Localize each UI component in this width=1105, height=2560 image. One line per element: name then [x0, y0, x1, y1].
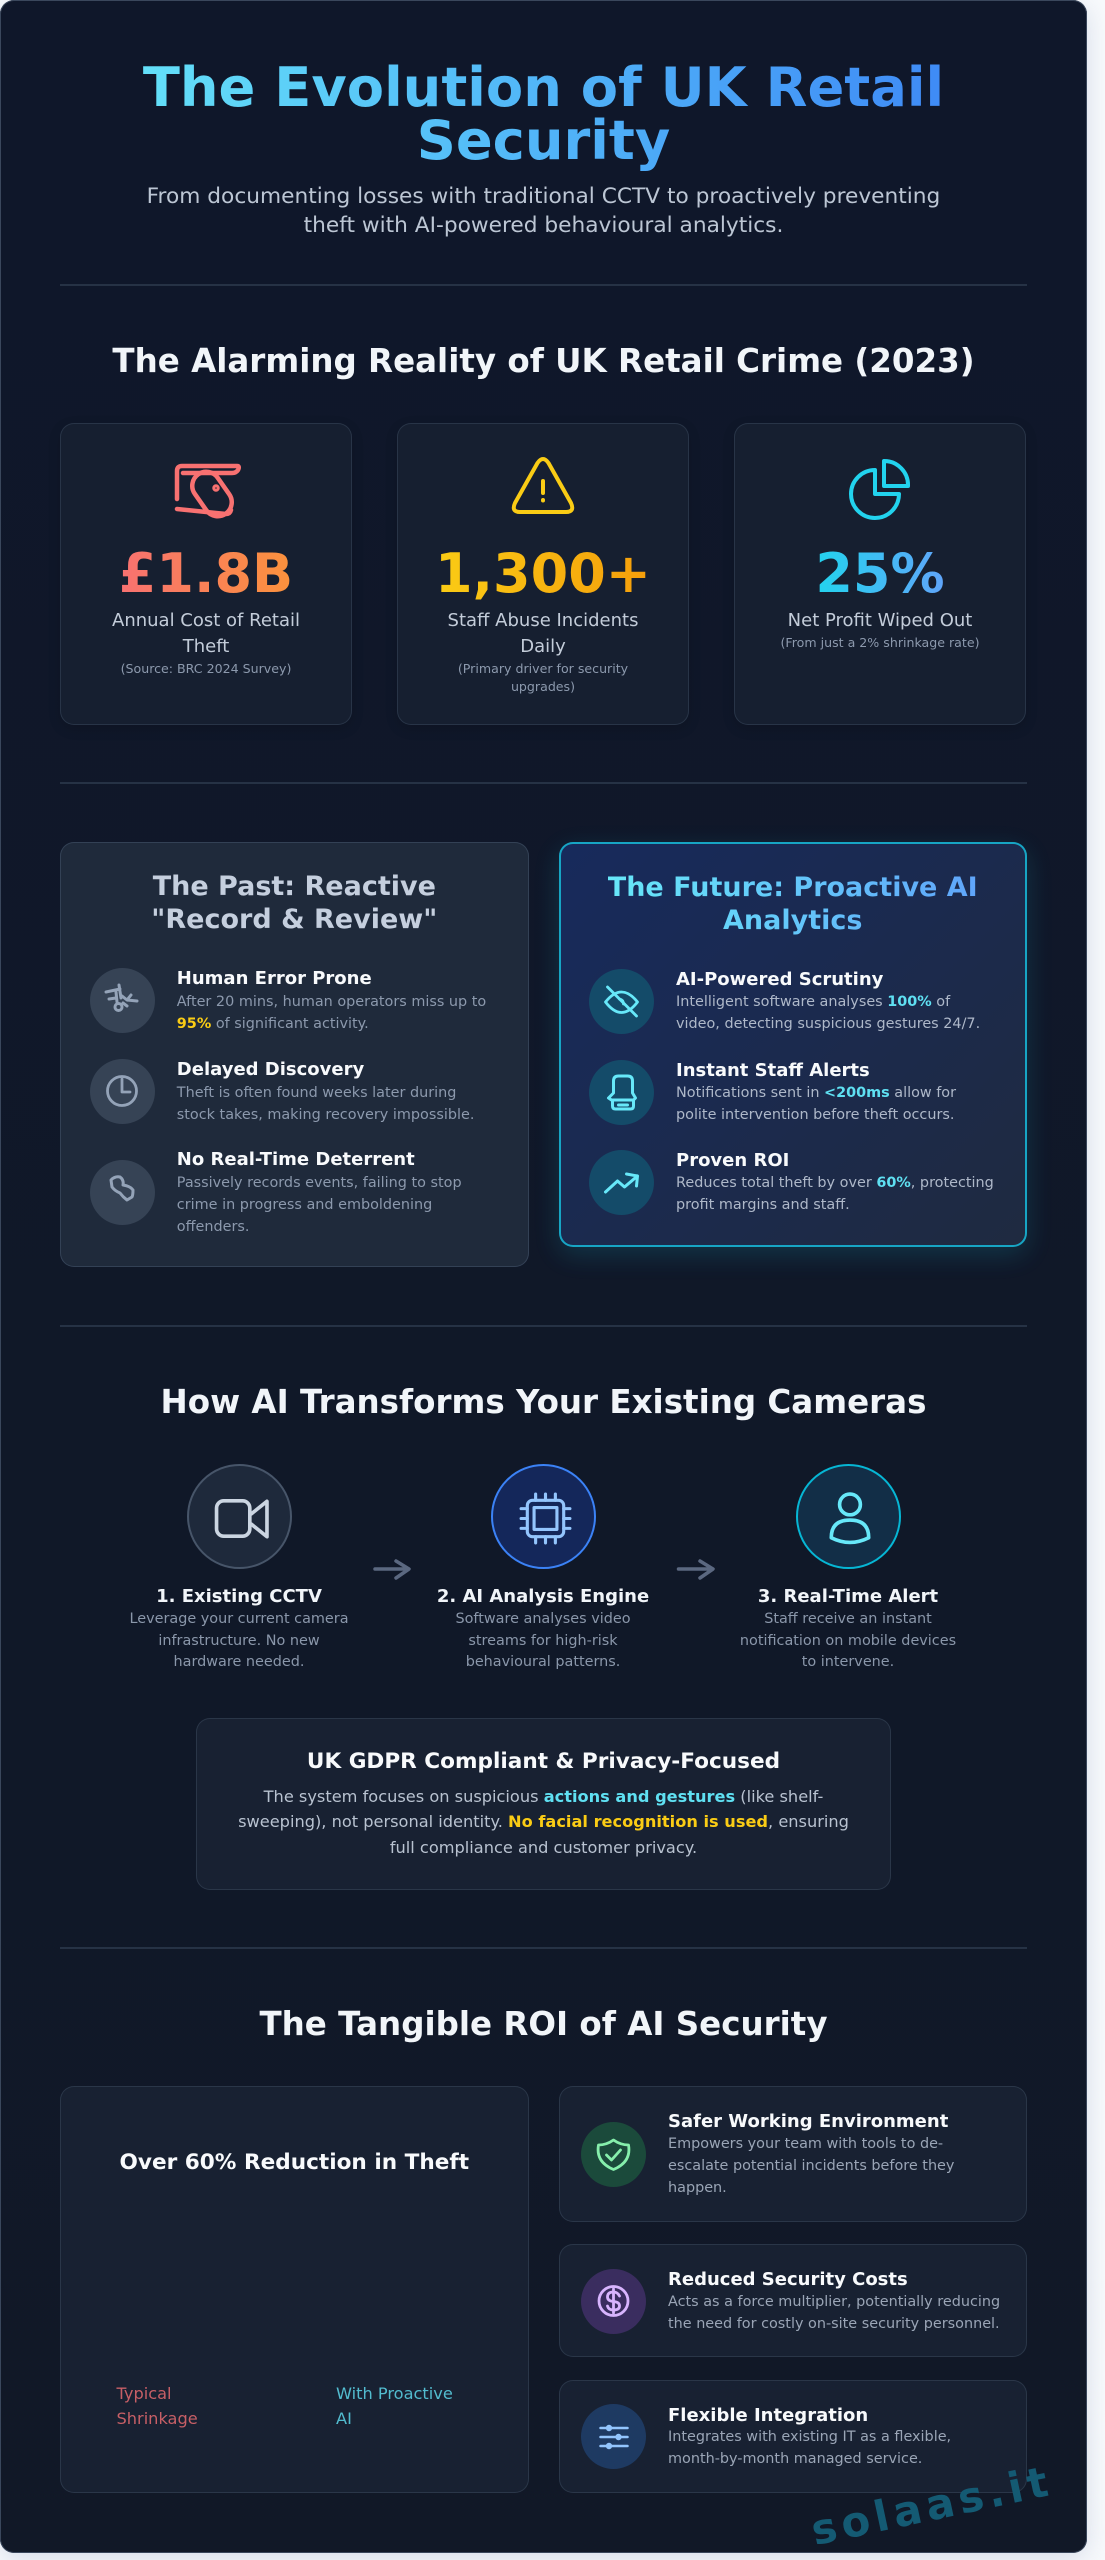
- item text: [676, 994, 980, 1032]
- step 3 text: notification on mobile devices: [740, 1633, 956, 1649]
- stat label: Annual Cost of Retail: [112, 610, 300, 631]
- item text: After 20 mins, human operators miss up to: [177, 994, 486, 1010]
- item: human error: [90, 968, 486, 1033]
- item: staff alerts: [589, 1060, 956, 1125]
- item title: Proven ROI: [676, 1150, 789, 1171]
- item title: Instant Staff Alerts: [676, 1060, 870, 1081]
- item text: 95% of significant activity.: [177, 1016, 369, 1032]
- item text: video, detecting suspicious gestures 24/7.: [676, 1016, 980, 1032]
- arrow: [373, 1559, 411, 1580]
- callout text: full compliance and customer privacy.: [390, 1838, 697, 1857]
- icon: money: [174, 464, 241, 518]
- icon: warning triangle: [512, 457, 574, 514]
- icon: eye with slash: [588, 969, 654, 1034]
- step 2 title: 2. AI Analysis Engine: [437, 1586, 649, 1607]
- stat label: Theft: [183, 636, 229, 657]
- heading: how AI transforms: How AI Transforms Your Existing Cameras: [161, 1383, 926, 1421]
- benefit card: safer environment: [558, 2086, 1027, 2222]
- legend label: with AI: [336, 2384, 453, 2428]
- card text: Empowers your team with tools to de-: [668, 2136, 943, 2152]
- icon: pie chart: [849, 459, 910, 520]
- stat label: Net Profit Wiped Out: [788, 610, 972, 631]
- panel heading: [151, 871, 437, 935]
- step 2 text: streams for high-risk: [468, 1633, 618, 1649]
- card text: month-by-month managed service.: [668, 2451, 922, 2467]
- stat label: [448, 610, 638, 657]
- item text: polite intervention before theft occurs.: [676, 1107, 954, 1123]
- benefit card: reduced costs: [558, 2244, 1027, 2357]
- panel: the past: [60, 842, 529, 1267]
- title: [60, 61, 1027, 179]
- item text: [176, 1085, 474, 1123]
- item: no deterrent: [90, 1149, 462, 1235]
- legend label: with AI: AI: [336, 2409, 352, 2428]
- step 1 text: infrastructure. No new: [158, 1633, 320, 1649]
- stat value: 25%: [815, 542, 945, 605]
- chart title: Over 60% Reduction in Theft: [120, 2150, 469, 2175]
- panel: the future: [558, 842, 1027, 1247]
- card text: [668, 2136, 954, 2196]
- icon: sliders: [580, 2404, 646, 2469]
- stat value: £1.8B: [119, 542, 293, 605]
- icon: broken eye: [90, 968, 155, 1033]
- callout text: The system focuses on suspicious actions and gestures (like shelf-: [264, 1787, 823, 1806]
- step 3 text: to intervene.: [802, 1654, 894, 1670]
- step 3 text: Staff receive an instant: [764, 1611, 932, 1627]
- icon: shield check: [580, 2122, 646, 2187]
- step 3 icon: user: [796, 1464, 901, 1569]
- item text: [676, 1085, 956, 1123]
- item text: Notifications sent in <200ms allow for: [676, 1085, 956, 1101]
- item: proven ROI: [589, 1150, 994, 1215]
- legend label: typical shrinkage: [116, 2384, 198, 2428]
- item title: Human Error Prone: [177, 968, 372, 989]
- item text: [176, 994, 486, 1032]
- panel heading: "Record & Review": [151, 904, 437, 935]
- icon: dollar coin: [580, 2269, 646, 2334]
- card title: Flexible Integration: [668, 2405, 868, 2426]
- panel heading: The Future: Proactive AI: [608, 872, 978, 903]
- item title: AI-Powered Scrutiny: [676, 969, 883, 990]
- step 1 text: [129, 1611, 349, 1670]
- item text: [177, 1175, 462, 1235]
- callout text: [238, 1787, 849, 1857]
- item text: offenders.: [177, 1219, 249, 1235]
- subtitle: [147, 184, 940, 238]
- benefit card: flexible integration: [558, 2380, 1027, 2493]
- panel heading: [608, 872, 978, 936]
- legend label: typical shrinkage: Typical: [116, 2384, 172, 2403]
- stat note: [458, 660, 628, 694]
- panel: reduction chart: [60, 2086, 529, 2493]
- step 1 title: 1. Existing CCTV: [156, 1586, 322, 1607]
- step 1 text: hardware needed.: [174, 1654, 304, 1670]
- step 2 text: behavioural patterns.: [466, 1654, 620, 1670]
- subtitle: theft with AI-powered behavioural analytics.: [304, 213, 783, 238]
- step 2 icon: cpu chip: [491, 1464, 596, 1569]
- step 1 text: Leverage your current camera: [129, 1611, 349, 1627]
- stat label: Daily: [520, 636, 566, 657]
- card text: [668, 2429, 951, 2467]
- stat source: (Source: BRC 2024 Survey): [121, 660, 291, 676]
- heading: alarming reality: The Alarming Reality of UK Retail Crime (2023): [112, 342, 975, 380]
- item title: No Real-Time Deterrent: [177, 1149, 415, 1170]
- stat value: 1,300+: [435, 542, 651, 605]
- legend label: typical shrinkage: Shrinkage: [116, 2409, 198, 2428]
- icon: broken link: [90, 1160, 155, 1225]
- item: delayed discovery: [90, 1059, 474, 1124]
- subtitle: From documenting losses with traditional CCTV to proactively preventing: [147, 184, 940, 209]
- heading: tangible ROI: The Tangible ROI of AI Security: [259, 2005, 828, 2043]
- item text: stock takes, making recovery impossible.: [177, 1107, 474, 1123]
- stat note: upgrades): [511, 679, 575, 694]
- panel: stat net profit: [734, 423, 1026, 725]
- icon: clock: [90, 1059, 155, 1124]
- panel heading: The Past: Reactive: [153, 871, 436, 902]
- item text: Intelligent software analyses 100% of: [676, 994, 950, 1010]
- card text: happen.: [668, 2180, 727, 2196]
- step 2 text: Software analyses video: [455, 1611, 630, 1627]
- item text: profit margins and staff.: [676, 1197, 850, 1213]
- callout heading: UK GDPR Compliant & Privacy-Focused: [307, 1748, 780, 1774]
- item title: Delayed Discovery: [177, 1059, 364, 1080]
- legend label: with AI: With Proactive: [336, 2384, 453, 2403]
- callout: GDPR: [196, 1718, 891, 1890]
- title: Security: [417, 109, 670, 172]
- card text: Integrates with existing IT as a flexible,: [668, 2429, 951, 2445]
- stat note: (Primary driver for security: [458, 660, 628, 676]
- step 3 text: [740, 1611, 956, 1670]
- stat label: [112, 610, 300, 657]
- item text: Theft is often found weeks later during: [177, 1085, 456, 1101]
- card title: Reduced Security Costs: [668, 2269, 908, 2290]
- item text: [676, 1175, 994, 1213]
- item text: Passively records events, failing to stop: [177, 1175, 462, 1191]
- panel: stat retail theft cost: [60, 423, 352, 725]
- icon: trending up: [588, 1150, 654, 1215]
- icon: bell: [588, 1060, 654, 1125]
- card text: escalate potential incidents before they: [668, 2158, 954, 2174]
- watermark: solaas.it: [807, 2456, 1057, 2555]
- card text: the need for costly on-site security personnel.: [668, 2316, 1000, 2332]
- step 3 title: 3. Real-Time Alert: [758, 1586, 938, 1607]
- callout text: sweeping), not personal identity. No facial recognition is used, ensuring: [238, 1812, 849, 1831]
- title: The Evolution of UK Retail: [143, 56, 944, 119]
- card text: Acts as a force multiplier, potentially reducing: [668, 2294, 1000, 2310]
- panel: stat staff abuse: [397, 423, 689, 725]
- arrow: [676, 1559, 715, 1580]
- step 2 text: [455, 1611, 630, 1670]
- item: AI scrutiny: [589, 969, 980, 1034]
- card title: Safer Working Environment: [668, 2111, 948, 2132]
- item text: crime in progress and emboldening: [177, 1197, 432, 1213]
- card text: [668, 2294, 1000, 2332]
- stat note: (From just a 2% shrinkage rate): [780, 634, 980, 650]
- step 1 icon: video camera: [187, 1464, 292, 1569]
- stat label: Staff Abuse Incidents: [448, 610, 638, 631]
- panel heading: Analytics: [723, 905, 862, 936]
- item text: Reduces total theft by over 60%, protecting: [676, 1175, 994, 1191]
